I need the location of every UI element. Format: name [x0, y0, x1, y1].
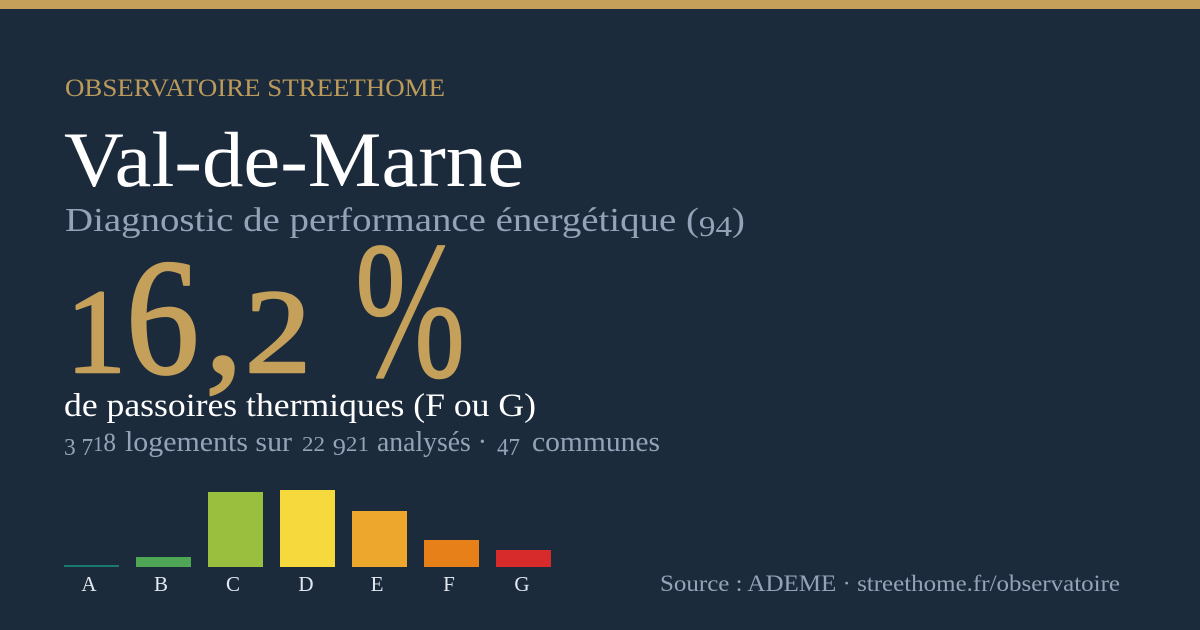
statistic detail: 22 [302, 432, 325, 456]
big statistic: % [355, 203, 465, 419]
bar labels: A [81, 572, 97, 596]
bar G [496, 550, 551, 567]
big statistic: , [205, 239, 243, 405]
bar labels: F [443, 572, 455, 596]
statistic detail: logements sur [125, 427, 293, 458]
bar labels: D [298, 572, 314, 596]
statistic detail: 9 [333, 435, 346, 461]
eyebrow: observatoire: OBSERVATOIRE STREETHOME [65, 75, 445, 102]
statistic detail: 21 [346, 432, 369, 456]
statistic detail: analysés · [377, 427, 487, 458]
statistic detail: 1 [93, 432, 103, 456]
bar labels: E [371, 572, 383, 596]
bar D [280, 490, 335, 567]
big statistic: 2 [245, 265, 311, 398]
statistic detail: 3 7 [64, 435, 93, 461]
big statistic: 1 [66, 265, 126, 398]
source: Source : ADEME · streethome.fr/observatoire [660, 571, 1120, 596]
bar chart: DPE classes [64, 490, 551, 596]
bar labels [81, 572, 530, 596]
bar B [136, 557, 191, 567]
statistic label: de passoires thermiques (F ou G) [64, 388, 536, 424]
bar labels: C [226, 572, 240, 596]
subtitle: Diagnostic de performance énergétique ( [65, 202, 619, 239]
subtitle: ) [732, 202, 745, 239]
bar F [424, 540, 479, 567]
title: Val-de-Marne [64, 116, 524, 203]
big statistic [66, 203, 465, 419]
top gold band [0, 0, 1200, 9]
statistic detail [64, 427, 660, 461]
big statistic: 6 [126, 225, 199, 409]
bar labels: G [514, 572, 530, 596]
statistic detail: 8 [103, 428, 116, 457]
bar E [352, 511, 407, 567]
statistic detail: 47 [497, 435, 520, 461]
bar A [64, 565, 119, 567]
statistic detail: communes [532, 427, 660, 458]
bar C [208, 492, 263, 567]
bar labels: B [154, 572, 168, 596]
subtitle: 94 [699, 211, 733, 243]
